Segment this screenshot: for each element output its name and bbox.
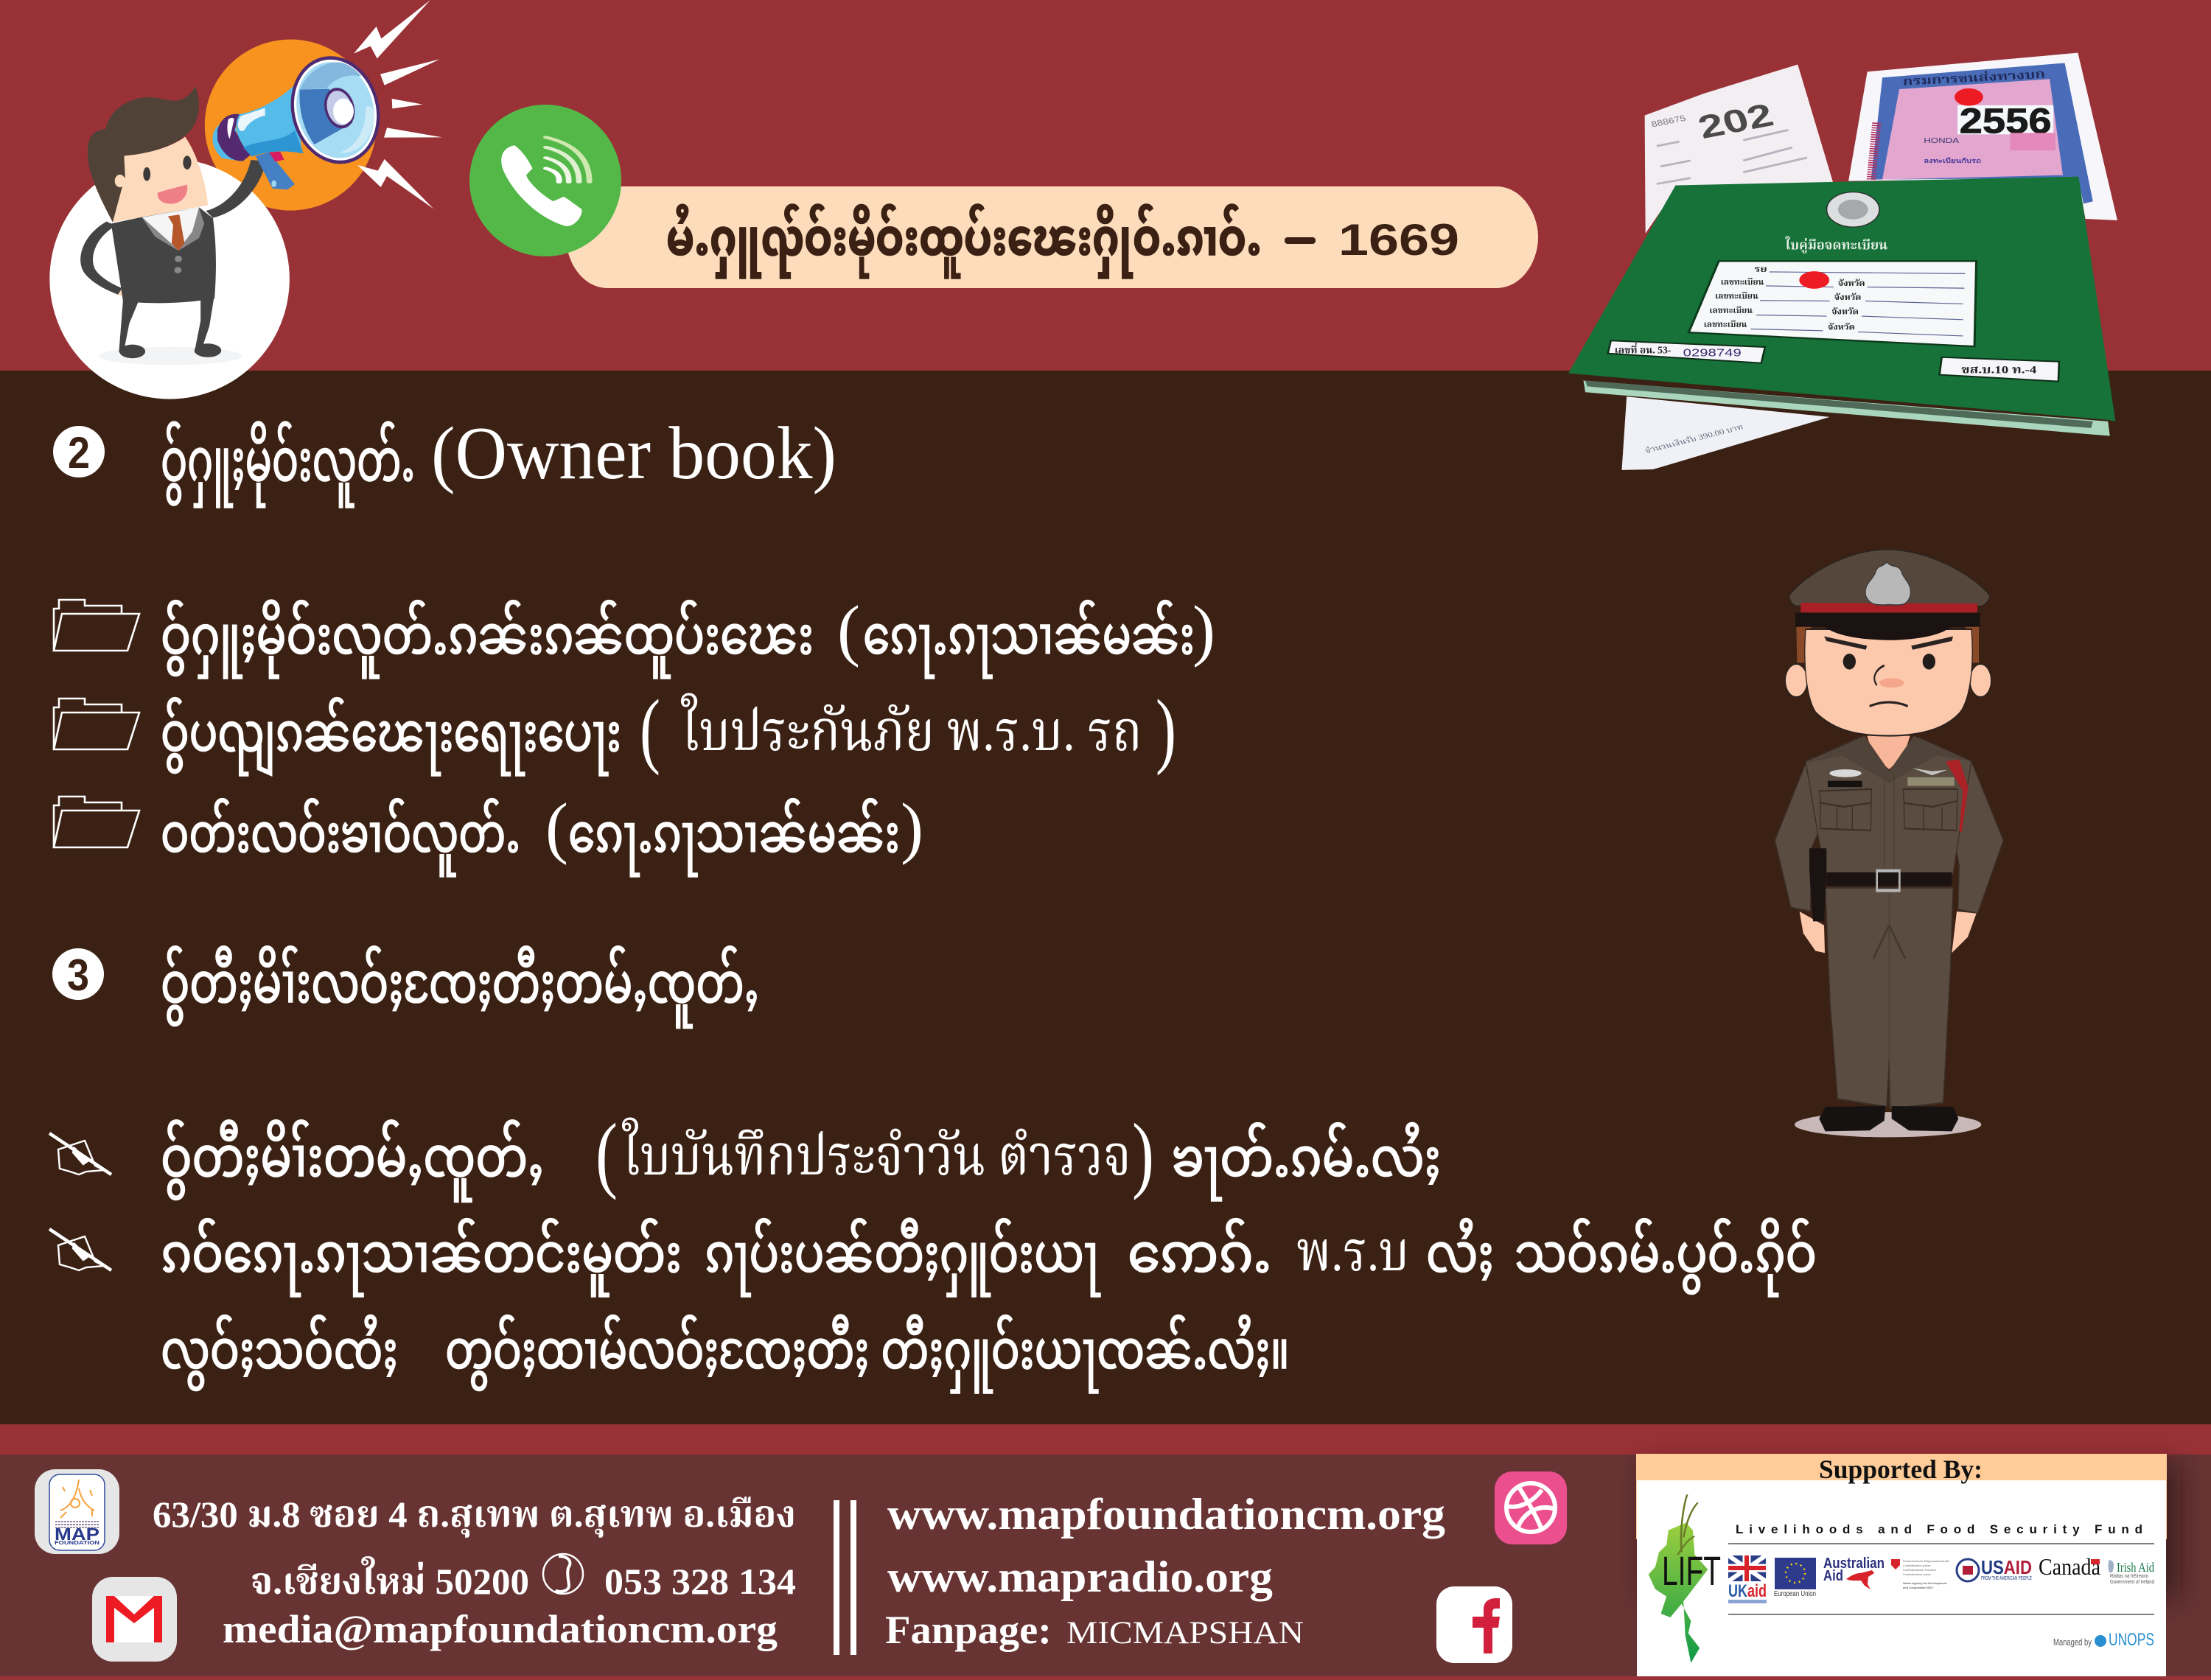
section 2 heading — [161, 412, 836, 508]
explanation line 1 — [161, 1219, 1817, 1296]
divider — [834, 1500, 856, 1655]
hotline number: 1669 — [1338, 215, 1459, 265]
website links: MICMAPSHAN — [1066, 1616, 1304, 1651]
logo: Swiss agency: Confederazione Svizzera — [1903, 1568, 1936, 1572]
logo: USAID: FROM THE AMERICAN PEOPLE — [1981, 1576, 2032, 1581]
photo: vehicle documents: 888675 — [1650, 113, 1687, 129]
logo: Swiss agency: and Cooperation SDC — [1903, 1586, 1933, 1589]
logo: Swiss agency — [1891, 1559, 1949, 1589]
photo: vehicle documents: จังหวัด — [1834, 293, 1862, 302]
logo: MAP Foundation: MAP — [55, 1525, 99, 1544]
photo: vehicle documents: 0298749 — [1683, 346, 1742, 359]
website links: www.mapfoundationcm.org — [887, 1490, 1445, 1539]
icon: businessman with megaphone — [49, 0, 442, 399]
logo: Australian Aid: Aid — [1823, 1568, 1843, 1584]
icon: dribbble — [1495, 1471, 1567, 1544]
address text: media@mapfoundationcm.org — [223, 1607, 778, 1651]
icon: pen 1 — [49, 1133, 111, 1175]
logo: USAID — [1957, 1556, 2032, 1581]
logo: managed by UNOPS — [2053, 1630, 2154, 1650]
photo: vehicle documents: เลขที่ อน. 53- — [1615, 343, 1671, 356]
address text: 053 328 134 — [604, 1561, 796, 1602]
police report line: ( — [595, 1107, 618, 1201]
address text — [153, 1494, 796, 1651]
logo: Swiss agency: Confédération suisse — [1903, 1564, 1931, 1567]
photo: vehicle documents: ขส.บ.10 ท.-4 — [1961, 364, 2037, 376]
explanation line 2 — [161, 1315, 1290, 1393]
police report line: ၶႃတ်ႉၵမ်ႉလႆႈ — [1172, 1123, 1441, 1200]
header band — [0, 0, 2211, 371]
LIFT fund name: Livelihoods and Food Security Fund — [1736, 1522, 2142, 1536]
logo: LIFT: LIFT — [1662, 1547, 1721, 1594]
photo: vehicle documents: 202 — [1694, 97, 1778, 146]
document item 1: ) — [1192, 592, 1215, 668]
logo: European Union: European Union — [1774, 1589, 1816, 1598]
photo: vehicle documents: เลขทะเบียน — [1721, 277, 1764, 287]
photo: vehicle documents: รย — [1755, 265, 1767, 274]
footer band — [0, 1424, 2211, 1680]
icon: folder 2 — [54, 699, 139, 749]
icon: green phone circle — [469, 105, 621, 256]
document item 1 — [161, 592, 1215, 678]
logo: MAP Foundation: FOUNDATION — [55, 1541, 99, 1546]
panel: supporters — [1636, 1454, 2180, 1676]
document item 3: ( — [545, 790, 568, 866]
document item 2: ) — [1156, 682, 1176, 776]
website links — [885, 1490, 1445, 1652]
logo: Irish Aid: Irish Aid — [2117, 1560, 2154, 1575]
explanation line 1: ၵဝ်ၵေႃႉၵႃသၢၼ်တင်းမူတ်း — [161, 1219, 682, 1296]
hotline number — [1285, 215, 1459, 265]
section 3 badge: 3 — [67, 951, 89, 1000]
document item 2: ( — [640, 682, 660, 776]
hotline pill — [566, 186, 1538, 288]
photo: vehicle documents: กรมการขนส่งทางบก — [1902, 68, 2046, 88]
section 2 heading: ဝ်ွႁူႈမိုဝ်းလူတ်ႉ — [161, 421, 415, 508]
section 2 badge: 2 — [68, 428, 90, 477]
logo: managed by UNOPS: Managed by — [2053, 1637, 2092, 1648]
police report line — [161, 1107, 1441, 1203]
icon: folder 1 — [54, 600, 139, 651]
icon: pen 2 — [49, 1229, 111, 1270]
logo: Australian Aid: Australian — [1823, 1555, 1885, 1572]
section 3 badge — [52, 948, 104, 1000]
document item 2 — [161, 682, 1176, 776]
document item 3 — [161, 790, 923, 876]
explanation line 2: တွဝ်ႈထၢမ်လဝ်ႈၸႄႈတီႈ တီႈႁူဝ်းယႃၸၼ်ႉလႆႈ။ — [445, 1315, 1290, 1393]
photo: vehicle documents: จังหวัด — [1831, 307, 1859, 316]
police report line: ဝ်ွတီႈမိၢ်းတမ်ႇၸူတ်ႇ — [161, 1119, 544, 1203]
logo: UK aid — [1728, 1555, 1767, 1603]
explanation line 1: သဝ်ၵမ်ႉပွဝ်ႉၵိုဝ် — [1515, 1219, 1817, 1296]
main brown panel — [0, 371, 2211, 1424]
photo: vehicle documents: ลงทะเบียนกับรถ — [1924, 157, 1981, 165]
website links: www.mapradio.org — [887, 1553, 1273, 1601]
police report line: ) — [1132, 1107, 1154, 1201]
explanation line 1: လႆႈ — [1426, 1219, 1494, 1284]
hotline text: မႆႉႁူၺ်ဝ်းမိုဝ်းထူပ်းၽေးႁိုဝ်ႉၵၢဝ်ႉ — [666, 204, 1262, 279]
photo: vehicle documents: จังหวัด — [1828, 322, 1855, 332]
photo: vehicle documents: ใบคู่มือจดทะเบียน — [1785, 235, 1887, 253]
explanation line 1: ၵႃပ်းပၼ်တီႈႁူဝ်းယႃ — [705, 1219, 1100, 1296]
section 3 heading: ဝ်ွတီႈမိၢ်းလဝ်ႈၸႄႈတီႈတမ်ႇၸူတ်ႇ — [161, 945, 759, 1029]
document item 3: ၵေႃႉၵႃသၢၼ်မၼ်း — [568, 799, 900, 876]
document item 3: ဝတ်းလဝ်းၶၢဝ်လူတ်ႉ — [161, 799, 520, 876]
photo: vehicle documents: จังหวัด — [1838, 279, 1865, 288]
photo: vehicle documents: HONDA — [1924, 136, 1959, 145]
website links: Fanpage: — [885, 1608, 1052, 1652]
logo: Irish Aid: Government of Ireland — [2110, 1578, 2154, 1585]
document item 2: ဝ်ွပၺျၵၼ်ၽေႃးရေႃးပေႃး — [161, 698, 621, 776]
address text: 63/30 ม.8 ซอย 4 ถ.สุเทพ ต.สุเทพ อ.เมือง — [153, 1494, 796, 1537]
document item 1: ( — [837, 592, 860, 668]
explanation line 2: လွဝ်ႈသဝ်ၸႆႈ — [161, 1315, 398, 1390]
photo: vehicle documents: เลขทะเบียน — [1709, 306, 1753, 315]
document item 3: ) — [901, 790, 923, 866]
photo: vehicle documents — [1568, 53, 2117, 470]
logo: USAID: USAID — [1981, 1556, 2032, 1578]
logo: Swiss agency: Schweizerische Eidgenossenschaft — [1903, 1559, 1949, 1563]
logo: Australian Aid — [1823, 1555, 1885, 1589]
logo: Irish Aid — [2108, 1560, 2154, 1585]
photo: vehicle documents: 2556 — [1960, 101, 2052, 141]
explanation line 1: ဢေၵ်ႉ — [1128, 1219, 1271, 1284]
icon: telephone — [543, 1554, 583, 1594]
logo: Canada: Canada — [2039, 1553, 2100, 1580]
police report line: ใบบันทึกประจำวัน ตำรวจ — [621, 1116, 1131, 1187]
logo: Irish Aid: Rialtas na hÉireann — [2110, 1572, 2148, 1579]
section 2 badge — [53, 426, 105, 477]
document item 2: ใบประกันภัย พ.ร.บ. รถ — [680, 692, 1142, 763]
document item 1: ဝ်ွႁူႈမိုဝ်းလူတ်ႉၵၼ်းၵၼ်ထူပ်းၽေး — [161, 601, 814, 678]
illustration: police officer — [1775, 550, 2003, 1137]
explanation line 1: พ.ร.บ — [1296, 1221, 1409, 1283]
section 2 heading: (Owner book) — [431, 412, 836, 495]
supporters heading: Supported By: — [1819, 1455, 1983, 1484]
photo: vehicle documents: เลขทะเบียน — [1715, 291, 1758, 301]
logo: LIFT — [1649, 1494, 1721, 1663]
logo: managed by UNOPS: UNOPS — [2109, 1630, 2154, 1650]
logo: MAP Foundation — [35, 1469, 119, 1554]
logo: Swiss agency: Swiss Agency for Development — [1903, 1581, 1947, 1585]
logo: Swiss agency: Confederaziun svizra — [1903, 1572, 1931, 1576]
logo: UK aid: UKaid — [1728, 1581, 1767, 1601]
address text: จ.เชียงใหม่ 50200 — [251, 1556, 529, 1602]
photo: vehicle documents: เลขทะเบียน — [1704, 320, 1747, 329]
photo: vehicle documents: จำนวนเงินรับ 390.00 บาท — [1644, 422, 1744, 455]
logo: European Union — [1774, 1558, 1816, 1598]
icon: mail — [92, 1577, 177, 1662]
document item 1: ၵေႃႉၵႃသၢၼ်မၼ်း — [863, 601, 1195, 678]
icon: facebook — [1436, 1586, 1512, 1663]
icon: folder 3 — [54, 797, 139, 847]
